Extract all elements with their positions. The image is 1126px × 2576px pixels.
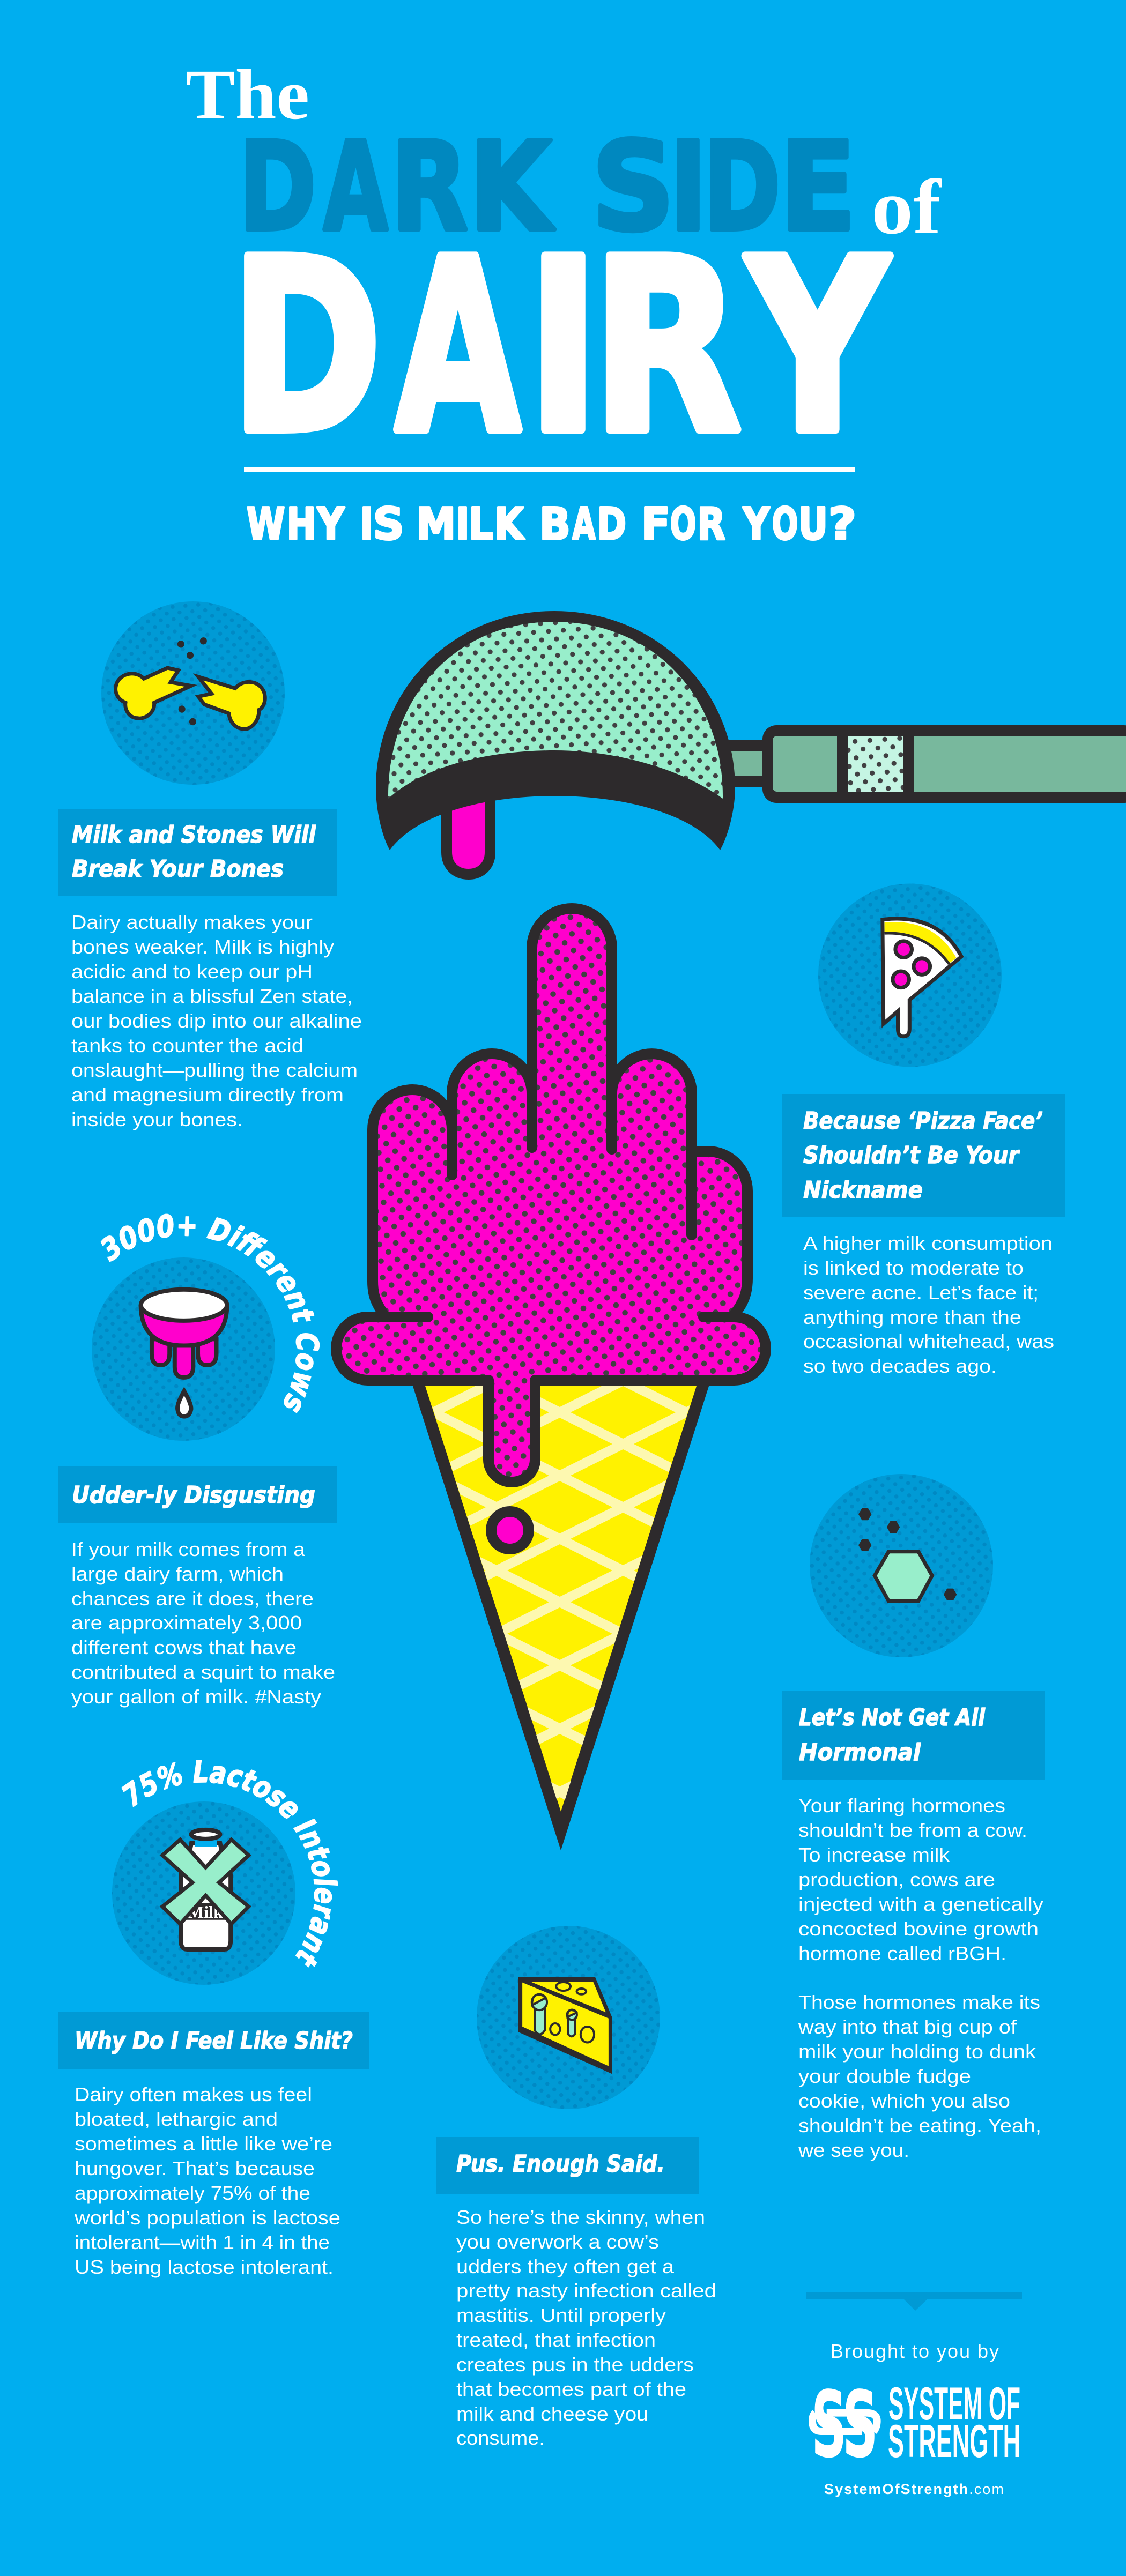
heading box: Nickname — [803, 1177, 923, 1204]
body text: concocted bovine growth — [798, 1918, 1039, 1940]
body text: is linked to moderate to — [803, 1257, 1024, 1279]
body text: Dairy often makes us feel — [75, 2083, 312, 2105]
subtitle: H — [287, 498, 316, 550]
curved label: 75% Lactose Intolerant — [121, 1760, 338, 1967]
heading box: Shouldn’t Be Your — [803, 1142, 1020, 1169]
title line: DARK SIDE: I — [669, 115, 707, 258]
body text: US being lactose intolerant. — [75, 2256, 334, 2278]
subtitle: W — [247, 499, 285, 550]
body text: and magnesium directly from — [71, 1084, 344, 1106]
icon: udder — [92, 1257, 275, 1441]
curved label: 3000+ Different Cows — [101, 1213, 320, 1413]
subtitle: D — [597, 498, 626, 550]
body text: our bodies dip into our alkaline — [71, 1010, 362, 1032]
body text: so two decades ago. — [803, 1355, 997, 1377]
title line: DARK SIDE: D — [239, 116, 316, 259]
body text — [71, 911, 362, 1130]
title line: DARK SIDE — [239, 115, 856, 259]
heading box — [58, 1466, 337, 1523]
scoop drip — [447, 793, 490, 874]
body text: different cows that have — [71, 1636, 297, 1658]
credit line: Brought to you by — [831, 2340, 999, 2362]
body text: To increase milk — [798, 1844, 950, 1866]
body text: inside your bones. — [71, 1108, 243, 1130]
heading box — [58, 2012, 369, 2069]
heading box: Hormonal — [799, 1739, 921, 1766]
icon: cheese — [477, 1926, 660, 2109]
waffle cone — [413, 1386, 709, 1850]
body text — [798, 1795, 1043, 2161]
subtitle: I — [456, 498, 470, 550]
body text: hungover. That’s because — [75, 2157, 315, 2179]
subtitle: S — [373, 499, 404, 550]
title line: DAIRY — [231, 208, 891, 486]
title line: DAIRY: R — [591, 209, 742, 486]
body text: creates pus in the udders — [456, 2354, 694, 2376]
icon: crossed milk bottle — [112, 1801, 295, 1985]
panel: udders — [58, 1213, 337, 1708]
body text: A higher milk consumption — [803, 1232, 1053, 1254]
title line: DARK SIDE: R — [391, 116, 468, 259]
body text: milk and cheese you — [456, 2403, 648, 2425]
subtitle: Y — [317, 498, 345, 549]
panel: pizza face — [782, 883, 1065, 1377]
subtitle: ? — [828, 499, 856, 550]
subtitle: O — [772, 498, 798, 550]
body text: injected with a genetically — [798, 1893, 1043, 1915]
body text: world’s population is lactose — [74, 2207, 340, 2229]
body text — [71, 1538, 335, 1708]
body text: bloated, lethargic and — [75, 2108, 278, 2130]
body text: cookie, which you also — [798, 2090, 1010, 2112]
subtitle: L — [469, 499, 493, 550]
panel: hormones — [782, 1474, 1045, 2161]
body text: Dairy actually makes your — [71, 911, 313, 933]
scoop fill — [388, 622, 723, 799]
body text: anything more than the — [803, 1306, 1021, 1328]
heading box: Because ‘Pizza Face’ — [803, 1107, 1043, 1135]
scoop handle — [727, 725, 1126, 803]
body text: pretty nasty infection called — [456, 2280, 716, 2302]
body text: treated, that infection — [456, 2329, 656, 2351]
title line: DAIRY: D — [231, 209, 382, 486]
title word: The: The — [186, 55, 309, 134]
title line: DARK SIDE: E — [780, 115, 856, 258]
ice cream scoop — [376, 611, 1126, 874]
subtitle: O — [670, 498, 696, 550]
website: SystemOfStrength.com — [824, 2481, 1004, 2497]
body text: you overwork a cow’s — [456, 2231, 659, 2253]
heading box — [436, 2137, 699, 2194]
title rule — [244, 467, 855, 472]
body text: contributed a squirt to make — [71, 1661, 335, 1683]
title line: DARK SIDE: A — [323, 116, 388, 259]
body text: severe acne. Let’s face it; — [803, 1282, 1039, 1304]
heading box: Break Your Bones — [72, 855, 284, 883]
body text: we see you. — [798, 2139, 909, 2161]
subtitle: R — [697, 498, 725, 550]
heading box: Udder-ly Disgusting — [72, 1481, 315, 1509]
subtitle: U — [798, 498, 828, 550]
subtitle: Y — [743, 498, 770, 550]
subtitle: I — [360, 498, 374, 550]
logo mark: SS: S — [842, 2372, 878, 2478]
body text: that becomes part of the — [456, 2378, 686, 2400]
body text: Those hormones make its — [798, 1991, 1040, 2013]
body text — [456, 2206, 716, 2449]
body text — [74, 2083, 340, 2278]
icon: pizza slice — [818, 883, 1002, 1067]
body text: chances are it does, there — [71, 1588, 314, 1610]
body text: hormone called rBGH. — [798, 1942, 1006, 1964]
subtitle: M — [416, 499, 456, 550]
heading box — [782, 1094, 1065, 1217]
body text: intolerant—with 1 in 4 in the — [75, 2231, 330, 2253]
body text: production, cows are — [798, 1868, 995, 1890]
heading box: Pus. Enough Said. — [456, 2150, 665, 2178]
subtitle: A — [572, 498, 596, 550]
panel: bones — [58, 601, 362, 1130]
body text: milk your holding to dunk — [798, 2041, 1036, 2063]
pointer bar — [806, 2292, 1022, 2311]
body text: shouldn’t be eating. Yeah, — [798, 2115, 1041, 2136]
heading box — [782, 1691, 1045, 1780]
panel: pus — [436, 1926, 716, 2449]
panel: lactose — [58, 1760, 369, 2278]
title line: DARK SIDE: D — [703, 116, 781, 259]
icon: crossed milk bottle: Milk — [188, 1902, 223, 1922]
body text: sometimes a little like we’re — [75, 2133, 332, 2155]
body text: approximately 75% of the — [75, 2182, 310, 2204]
logo mark: SS — [811, 2372, 878, 2478]
logo mark: SS: S — [811, 2372, 847, 2478]
title line: DAIRY: A — [395, 208, 522, 486]
body text: acidic and to keep our pH — [71, 961, 313, 982]
body text: your double fudge — [798, 2065, 971, 2087]
body text: way into that big cup of — [798, 2016, 1017, 2038]
heading box: Let’s Not Get All — [799, 1704, 986, 1731]
body text: udders they often get a — [456, 2255, 675, 2277]
title line: DAIRY: I — [527, 209, 600, 486]
subtitle — [247, 498, 856, 550]
body text: your gallon of milk. #Nasty — [71, 1686, 321, 1708]
body text — [803, 1232, 1054, 1377]
subtitle: K — [494, 499, 525, 550]
scoop dome — [376, 611, 735, 850]
heading box: Why Do I Feel Like Shit? — [75, 2027, 353, 2054]
subtitle: B — [539, 498, 571, 550]
body text: large dairy farm, which — [71, 1563, 284, 1585]
body text: shouldn’t be from a cow. — [798, 1819, 1027, 1841]
body text: are approximately 3,000 — [71, 1612, 302, 1634]
footer: credit — [806, 2292, 1022, 2497]
body text: balance in a blissful Zen state, — [71, 985, 353, 1007]
body text: Your flaring hormones — [798, 1795, 1005, 1816]
icon: broken bone — [101, 601, 285, 785]
heading box: Milk and Stones Will — [72, 821, 316, 848]
heading box — [58, 809, 337, 896]
body text: mastitis. Until properly — [456, 2304, 666, 2326]
body text: So here’s the skinny, when — [456, 2206, 705, 2228]
title line: DAIRY: Y — [744, 209, 891, 486]
falling drop — [491, 1512, 529, 1549]
body text: If your milk comes from a — [71, 1538, 306, 1560]
body text: bones weaker. Milk is highly — [71, 936, 334, 958]
logo wordmark — [888, 2378, 1020, 2467]
title — [186, 55, 943, 486]
icon: hormone molecules — [810, 1474, 993, 1657]
middle finger ice cream hand — [336, 909, 766, 1482]
body text: occasional whitehead, was — [803, 1330, 1054, 1352]
subtitle: F — [641, 499, 670, 550]
body text: onslaught—pulling the calcium — [71, 1059, 358, 1081]
body text: consume. — [456, 2427, 545, 2449]
body text: tanks to counter the acid — [71, 1034, 303, 1056]
title line: DARK SIDE: S — [591, 115, 675, 259]
title line: DARK SIDE: K — [469, 115, 555, 258]
title word: of: of — [871, 163, 943, 250]
